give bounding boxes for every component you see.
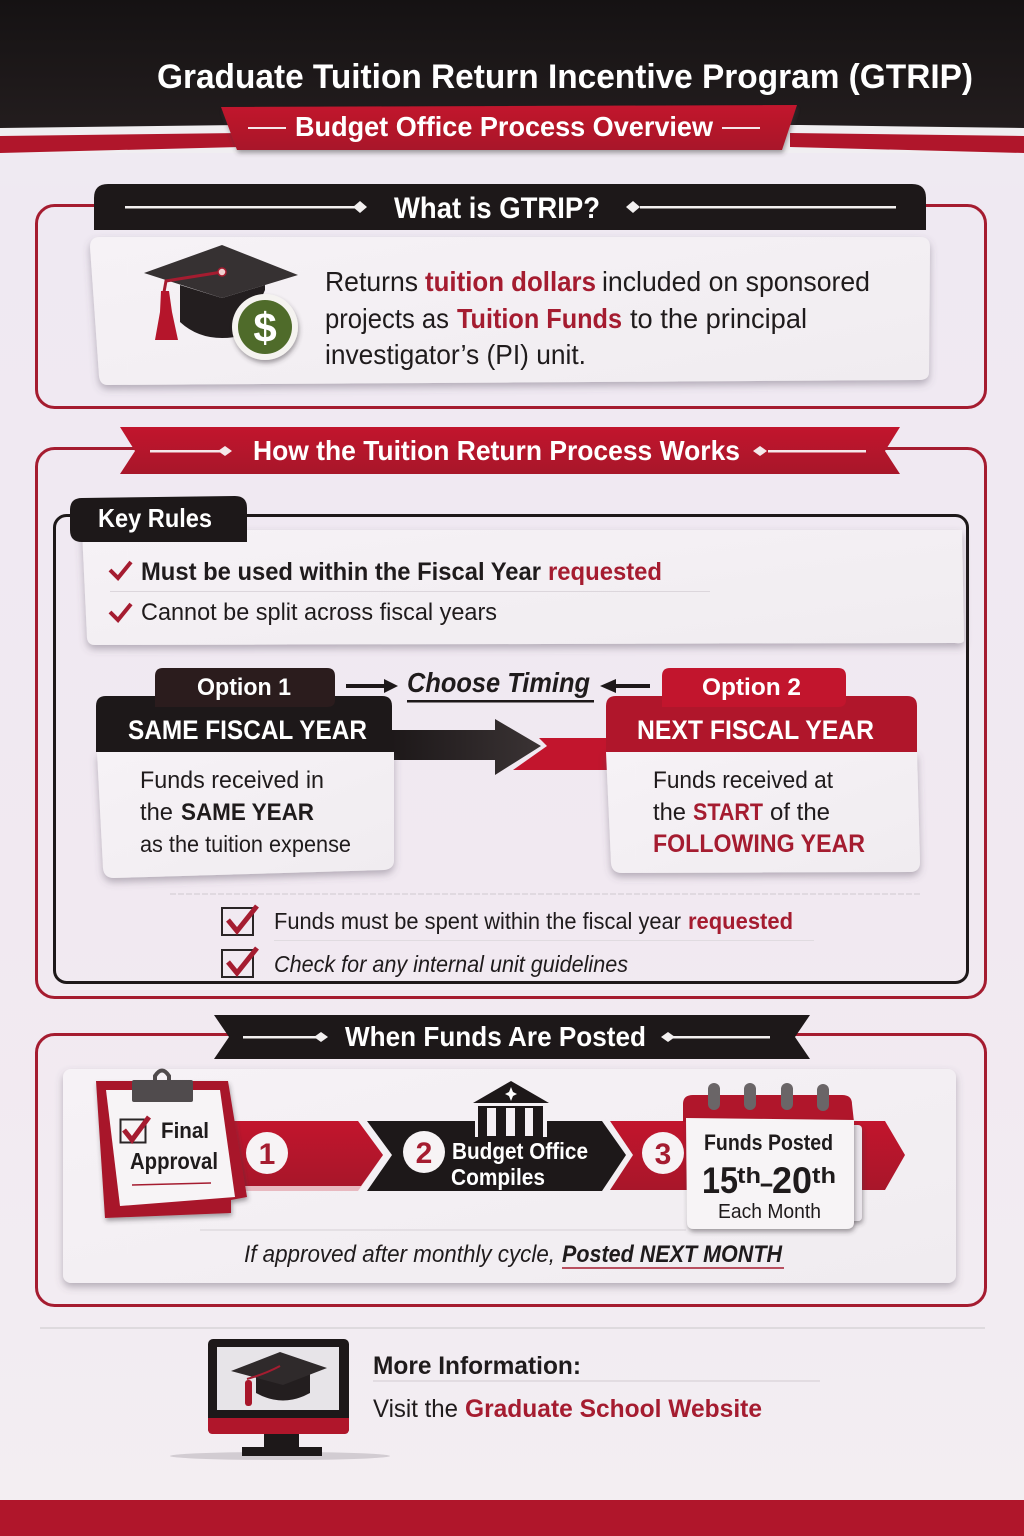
subtitle ribbon: Budget Office Process Overview bbox=[295, 111, 713, 142]
icon: clipboard final approval bbox=[96, 1070, 247, 1218]
description text: projects as bbox=[325, 303, 449, 334]
option 2 card bbox=[606, 668, 920, 873]
arrow: same year to next year bbox=[392, 719, 610, 775]
section heading: what is GTRIP: What is GTRIP? bbox=[394, 192, 600, 225]
panel: key rules bbox=[70, 496, 964, 645]
rule 1: requested bbox=[548, 558, 662, 586]
step 2 arrow: Compiles bbox=[451, 1164, 545, 1190]
icon: calendar funds posted: th bbox=[737, 1163, 761, 1188]
posting note: If approved after monthly cycle, bbox=[244, 1241, 555, 1268]
posting note bbox=[244, 1241, 784, 1268]
option 2 tab bbox=[662, 668, 846, 707]
title: Graduate Tuition Return Incentive Program (GTRIP) bbox=[157, 58, 973, 96]
icon: calendar funds posted: 15 bbox=[702, 1160, 738, 1201]
more information bbox=[373, 1352, 820, 1423]
section heading ribbon: process bbox=[120, 427, 900, 474]
more information: Graduate School Website bbox=[465, 1395, 762, 1423]
description text: investigator’s (PI) unit. bbox=[325, 339, 586, 370]
note: internal unit guidelines: Check for any internal unit guidelines bbox=[274, 951, 628, 977]
header band bbox=[0, 0, 1024, 153]
more information: More Information: bbox=[373, 1352, 581, 1380]
icon: clipboard final approval: Final bbox=[161, 1118, 209, 1143]
icon: calendar funds posted: th bbox=[812, 1163, 836, 1188]
icon: calendar funds posted: – bbox=[760, 1167, 773, 1200]
panel: when funds are posted bbox=[36, 1015, 986, 1306]
note: spend within fiscal year: requested bbox=[688, 908, 793, 934]
step 2 arrow bbox=[367, 1121, 626, 1191]
icon: calendar funds posted bbox=[683, 1083, 862, 1229]
icon: calendar funds posted: 20 bbox=[772, 1160, 812, 1201]
option 2 card: FOLLOWING YEAR bbox=[653, 830, 865, 858]
option 1 card: Funds received in bbox=[140, 767, 324, 794]
description text: to the principal bbox=[630, 303, 807, 334]
section heading ribbon: funds posted: When Funds Are Posted bbox=[345, 1021, 646, 1052]
note: spend within fiscal year bbox=[222, 906, 793, 935]
description card bbox=[90, 237, 930, 385]
option 2 card: Funds received at bbox=[653, 767, 833, 794]
step 1 arrow bbox=[226, 1121, 383, 1191]
inner frame bbox=[54, 516, 968, 982]
subtitle ribbon bbox=[221, 105, 797, 150]
description text: tuition dollars bbox=[425, 266, 596, 297]
step 3 arrow bbox=[610, 1121, 905, 1190]
description text: Returns bbox=[325, 266, 418, 297]
section heading ribbon: process: How the Tuition Return Process Works bbox=[253, 435, 740, 466]
option 1 tab bbox=[155, 668, 335, 707]
option 2 tab: Option 2 bbox=[702, 674, 801, 701]
note: spend within fiscal year: Funds must be spent within the fiscal year bbox=[274, 908, 681, 934]
footer band bbox=[0, 1500, 1024, 1536]
icon: clipboard final approval: Approval bbox=[130, 1148, 218, 1174]
choose timing label: Choose Timing bbox=[407, 667, 590, 698]
section heading ribbon: funds posted bbox=[214, 1015, 810, 1059]
description text: Tuition Funds bbox=[457, 303, 622, 334]
choose timing label bbox=[346, 667, 650, 702]
timeline card bbox=[63, 1069, 956, 1283]
key rules tab bbox=[70, 496, 247, 542]
step 2 arrow: Budget Office bbox=[452, 1138, 588, 1164]
option 1 tab: Option 1 bbox=[197, 674, 291, 701]
option 1 card: the bbox=[140, 799, 173, 826]
icon: graduation cap with dollar coin: $ bbox=[253, 304, 277, 351]
step 2 arrow: 2 bbox=[416, 1137, 432, 1170]
icon: bank building bbox=[473, 1081, 549, 1137]
rule 1: Must be used within the Fiscal Year bbox=[141, 558, 541, 586]
icon: computer monitor with graduation cap bbox=[170, 1339, 390, 1460]
description text: included on sponsored bbox=[602, 266, 870, 297]
option 2 card: the bbox=[653, 799, 686, 826]
step 3 arrow: 3 bbox=[655, 1138, 671, 1171]
more information: Visit the bbox=[373, 1395, 458, 1423]
section heading: what is GTRIP bbox=[94, 184, 926, 230]
description text bbox=[325, 266, 870, 370]
option 2 card: START bbox=[693, 799, 763, 826]
option 1 card: SAME YEAR bbox=[181, 799, 314, 826]
icon: calendar funds posted: Each Month bbox=[718, 1201, 821, 1223]
posting note: Posted NEXT MONTH bbox=[562, 1241, 783, 1268]
icon: calendar funds posted: Funds Posted bbox=[704, 1130, 833, 1155]
option 1 card: SAME FISCAL YEAR bbox=[128, 715, 367, 745]
option 1 card: as the tuition expense bbox=[140, 831, 351, 857]
panel: what is GTRIP bbox=[36, 184, 986, 408]
option 2 card: of the bbox=[770, 799, 830, 826]
step 1 arrow: 1 bbox=[259, 1138, 275, 1171]
panel: how the tuition return process works bbox=[36, 427, 986, 998]
option 2 card: NEXT FISCAL YEAR bbox=[637, 715, 874, 745]
option 1 card bbox=[96, 668, 394, 878]
icon: graduation cap with dollar coin bbox=[144, 245, 298, 360]
key rules tab: Key Rules bbox=[98, 503, 212, 533]
rule 2: Cannot be split across fiscal years bbox=[141, 599, 497, 626]
